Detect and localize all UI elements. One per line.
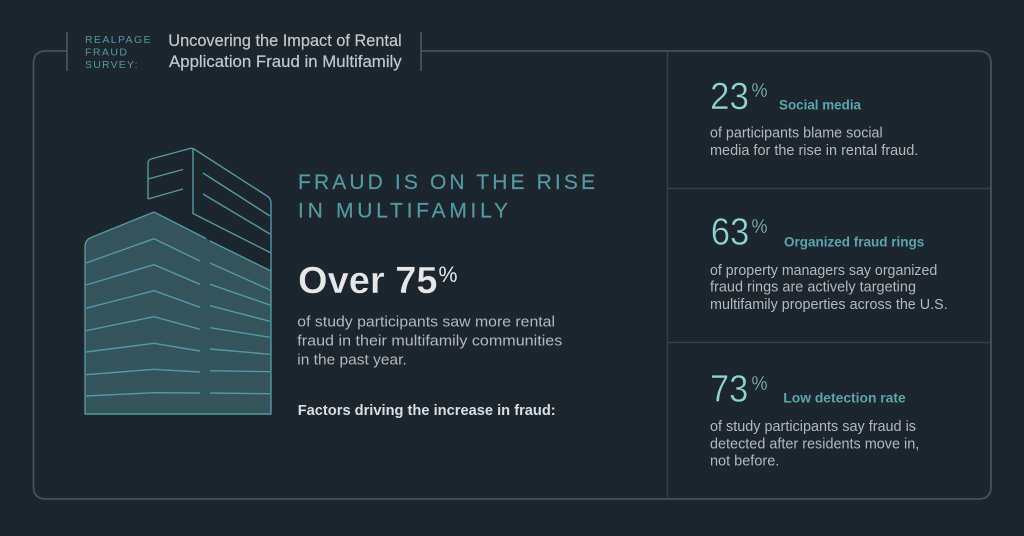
- title: Application Fraud in Multifamily: [169, 53, 402, 71]
- eyebrow: survey label: [85, 34, 150, 71]
- building lower block: [85, 212, 271, 414]
- eyebrow: survey label: SURVEY:: [85, 59, 138, 71]
- icon: office building: [85, 148, 271, 414]
- text block: study participants: of study participants saw more rental: [297, 315, 555, 331]
- panel: social media stat: 23: [710, 76, 749, 118]
- panel: social media stat: of participants blame social: [710, 126, 883, 142]
- subheading: factors: Factors driving the increase in fraud:: [298, 402, 556, 419]
- panel: organized fraud rings stat: Organized fraud rings: [784, 233, 924, 249]
- title: [168, 32, 402, 71]
- eyebrow: survey label: REALPAGE: [85, 34, 150, 46]
- panel: organized fraud rings stat: of property managers say organized: [710, 263, 937, 279]
- building outline: [85, 212, 271, 414]
- text block: study participants: in the past year.: [297, 352, 407, 368]
- heading: fraud on the rise: [298, 171, 595, 222]
- panel: social media stat: %: [752, 80, 768, 102]
- panel: low detection rate stat: [710, 369, 919, 470]
- building upper block: [148, 148, 271, 271]
- panel: low detection rate stat: of study participants say fraud is: [710, 419, 916, 435]
- title: Uncovering the Impact of Rental: [168, 32, 402, 50]
- panel: social media stat: [710, 76, 918, 159]
- panel: social media stat: Social media: [779, 96, 861, 112]
- panel: social media stat: media for the rise in rental fraud.: [710, 143, 918, 159]
- panel: organized fraud rings stat: [710, 211, 948, 313]
- text block: study participants: [297, 315, 562, 368]
- text block: study participants: fraud in their multifamily communities: [297, 334, 562, 350]
- panel: low detection rate stat: 73: [710, 369, 748, 411]
- heading: fraud on the rise: FRAUD IS ON THE RISE: [298, 171, 595, 194]
- panel: low detection rate stat: detected after residents move in,: [710, 436, 919, 452]
- panel: organized fraud rings stat: %: [752, 216, 768, 238]
- heading: fraud on the rise: IN MULTIFAMILY: [298, 199, 508, 222]
- eyebrow: survey label: FRAUD: [85, 46, 127, 58]
- panel: organized fraud rings stat: 63: [711, 211, 749, 253]
- panel: organized fraud rings stat: multifamily properties across the U.S.: [710, 297, 948, 313]
- panel: organized fraud rings stat: fraud rings are actively targeting: [710, 280, 916, 296]
- panel: low detection rate stat: Low detection rate: [783, 390, 906, 406]
- key stat: over 75%: Over 75: [298, 260, 438, 302]
- upper windows: [148, 170, 270, 234]
- panel: low detection rate stat: not before.: [710, 454, 779, 470]
- panel: low detection rate stat: %: [752, 373, 768, 395]
- key stat: over 75%: %: [438, 262, 458, 287]
- building floor lines: [86, 239, 270, 396]
